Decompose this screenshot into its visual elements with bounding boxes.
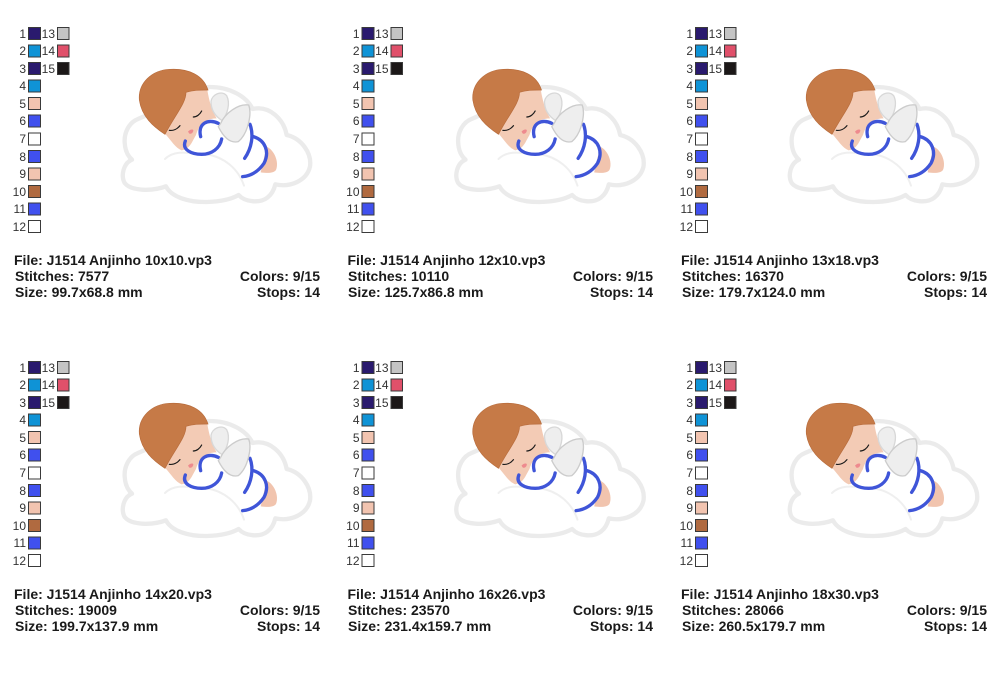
color list: 3 xyxy=(353,62,360,76)
panel: design 18x30 xyxy=(680,361,987,634)
color list: 1 xyxy=(353,27,360,41)
color list: 2 xyxy=(19,44,26,58)
file details: Size: 179.7x124.0 mm xyxy=(682,284,825,300)
color list: 8 xyxy=(19,484,26,498)
color list: 15 xyxy=(42,62,55,76)
color list: 4 xyxy=(353,413,360,427)
file details: Stitches: 7577 xyxy=(15,268,109,284)
color list: 13 xyxy=(42,361,55,375)
color list: 10 xyxy=(680,519,693,533)
color list: 14 xyxy=(42,44,55,58)
color list: 15 xyxy=(375,62,389,76)
color list: 10 xyxy=(13,519,26,533)
file details xyxy=(14,586,320,634)
file details xyxy=(681,586,987,634)
illustration: sleeping angel on cloud xyxy=(456,403,644,536)
color list: 12 xyxy=(13,220,26,234)
color list: 4 xyxy=(686,79,693,93)
color list: 14 xyxy=(709,378,722,392)
file details: Stitches: 28066 xyxy=(682,602,784,618)
color list: 15 xyxy=(709,62,722,76)
color list: 11 xyxy=(681,202,693,216)
file details: Stops: 14 xyxy=(257,284,320,300)
file details xyxy=(348,586,653,634)
illustration: sleeping angel on cloud xyxy=(790,403,977,536)
file details: Colors: 9/15 xyxy=(240,268,320,284)
color list xyxy=(680,361,736,568)
file details: Colors: 9/15 xyxy=(907,602,987,618)
color list: 11 xyxy=(347,536,360,550)
color list: 6 xyxy=(19,114,26,128)
illustration: sleeping angel on cloud xyxy=(123,403,310,536)
color list: 15 xyxy=(709,396,722,410)
color list: 11 xyxy=(347,202,360,216)
color list: 8 xyxy=(686,484,693,498)
color list: 7 xyxy=(19,132,26,146)
color list: 14 xyxy=(709,44,722,58)
color list xyxy=(680,27,736,234)
color list: 6 xyxy=(686,448,693,462)
color list: 7 xyxy=(686,466,693,480)
file details: Size: 99.7x68.8 mm xyxy=(15,284,143,300)
color list: 9 xyxy=(353,167,360,181)
color list: 2 xyxy=(686,378,693,392)
color list: 9 xyxy=(19,167,26,181)
file details xyxy=(348,252,653,300)
file details: Stitches: 10110 xyxy=(348,268,449,284)
file details: Colors: 9/15 xyxy=(240,602,320,618)
color list: 10 xyxy=(346,519,360,533)
panel: design 16x26 xyxy=(346,361,653,634)
panel: design 12x10 xyxy=(346,27,653,300)
color list xyxy=(346,27,402,234)
color list: 3 xyxy=(19,396,26,410)
color list: 6 xyxy=(353,448,360,462)
file details: Size: 260.5x179.7 mm xyxy=(682,618,825,634)
color list: 10 xyxy=(13,185,26,199)
panel: design 14x20 xyxy=(13,361,320,634)
file details: Stops: 14 xyxy=(924,618,987,634)
color list: 12 xyxy=(346,554,360,568)
color list: 10 xyxy=(346,185,360,199)
color list: 5 xyxy=(686,97,693,111)
color list: 5 xyxy=(353,97,360,111)
illustration: sleeping angel on cloud xyxy=(456,69,644,202)
color list: 1 xyxy=(19,27,26,41)
color list: 7 xyxy=(353,466,360,480)
color list xyxy=(13,361,69,568)
color list: 4 xyxy=(686,413,693,427)
color list: 5 xyxy=(19,97,26,111)
color list: 15 xyxy=(375,396,389,410)
color list: 5 xyxy=(686,431,693,445)
color list: 12 xyxy=(680,220,693,234)
color list: 11 xyxy=(681,536,693,550)
illustration: sleeping angel on cloud xyxy=(790,69,977,202)
color list: 2 xyxy=(686,44,693,58)
file details: File: J1514 Anjinho 16x26.vp3 xyxy=(348,586,546,602)
color list: 6 xyxy=(353,114,360,128)
color list: 4 xyxy=(19,79,26,93)
color list: 5 xyxy=(19,431,26,445)
file details: Colors: 9/15 xyxy=(573,268,653,284)
color list: 13 xyxy=(375,27,389,41)
color list: 14 xyxy=(375,44,389,58)
color list: 7 xyxy=(353,132,360,146)
color list: 9 xyxy=(686,167,693,181)
color list: 8 xyxy=(19,150,26,164)
file details: Colors: 9/15 xyxy=(573,602,653,618)
color list: 1 xyxy=(686,27,693,41)
file details: Stops: 14 xyxy=(590,284,653,300)
illustration: sleeping angel on cloud xyxy=(123,69,310,202)
color list: 3 xyxy=(353,396,360,410)
file details: Stitches: 16370 xyxy=(682,268,784,284)
file details: File: J1514 Anjinho 12x10.vp3 xyxy=(348,252,546,268)
file details: Stops: 14 xyxy=(590,618,653,634)
color list: 2 xyxy=(19,378,26,392)
color list xyxy=(13,27,69,234)
color list: 13 xyxy=(375,361,389,375)
color list: 11 xyxy=(14,536,26,550)
color list: 11 xyxy=(14,202,26,216)
color list: 14 xyxy=(375,378,389,392)
color list: 13 xyxy=(709,361,722,375)
file details: Size: 231.4x159.7 mm xyxy=(348,618,491,634)
color list xyxy=(346,361,402,568)
color list: 3 xyxy=(19,62,26,76)
color list: 1 xyxy=(353,361,360,375)
file details xyxy=(681,252,987,300)
color list: 5 xyxy=(353,431,360,445)
file details: Size: 125.7x86.8 mm xyxy=(348,284,483,300)
color list: 4 xyxy=(19,413,26,427)
file details: Colors: 9/15 xyxy=(907,268,987,284)
file details: File: J1514 Anjinho 10x10.vp3 xyxy=(14,252,212,268)
color list: 4 xyxy=(353,79,360,93)
panel: design 13x18 xyxy=(680,27,987,300)
file details: Size: 199.7x137.9 mm xyxy=(15,618,158,634)
color list: 6 xyxy=(19,448,26,462)
color list: 12 xyxy=(680,554,693,568)
file details: Stops: 14 xyxy=(924,284,987,300)
file details: Stops: 14 xyxy=(257,618,320,634)
color list: 8 xyxy=(353,484,360,498)
color list: 3 xyxy=(686,396,693,410)
color list: 12 xyxy=(346,220,360,234)
color list: 8 xyxy=(686,150,693,164)
color list: 1 xyxy=(686,361,693,375)
file details: File: J1514 Anjinho 13x18.vp3 xyxy=(681,252,879,268)
file details: File: J1514 Anjinho 18x30.vp3 xyxy=(681,586,879,602)
color list: 9 xyxy=(686,501,693,515)
color list: 7 xyxy=(19,466,26,480)
panel: design 10x10 xyxy=(13,27,320,300)
color list: 9 xyxy=(19,501,26,515)
file details: Stitches: 19009 xyxy=(15,602,117,618)
color list: 13 xyxy=(709,27,722,41)
color list: 1 xyxy=(19,361,26,375)
color list: 7 xyxy=(686,132,693,146)
file details: File: J1514 Anjinho 14x20.vp3 xyxy=(14,586,212,602)
file details: Stitches: 23570 xyxy=(348,602,450,618)
color list: 2 xyxy=(353,378,360,392)
color list: 14 xyxy=(42,378,55,392)
color list: 15 xyxy=(42,396,55,410)
color list: 10 xyxy=(680,185,693,199)
color list: 2 xyxy=(353,44,360,58)
file details xyxy=(14,252,320,300)
color list: 13 xyxy=(42,27,55,41)
color list: 6 xyxy=(686,114,693,128)
color list: 9 xyxy=(353,501,360,515)
color list: 8 xyxy=(353,150,360,164)
color list: 3 xyxy=(686,62,693,76)
color list: 12 xyxy=(13,554,26,568)
